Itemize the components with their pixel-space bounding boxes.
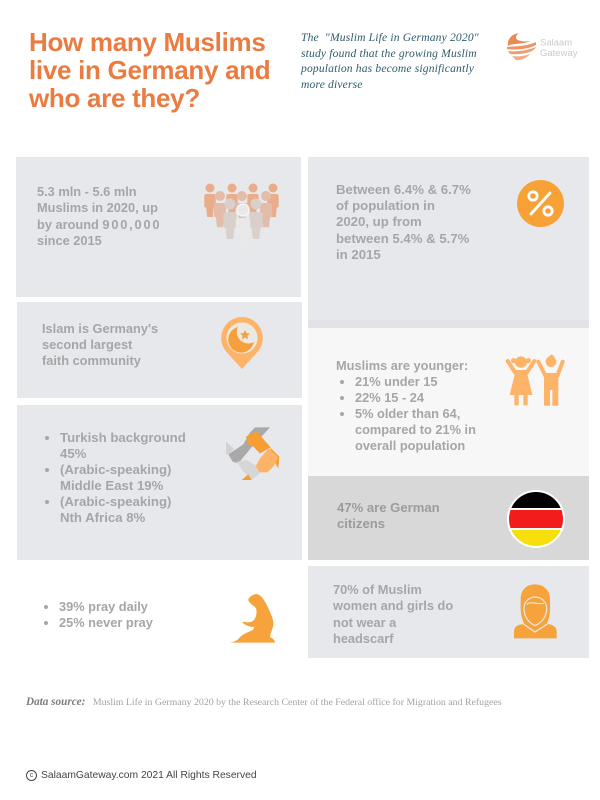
share text: in 2015: [336, 247, 381, 262]
population text: since 2015: [37, 233, 102, 248]
logo: Salaam Gateway: [507, 33, 578, 60]
prayer list: [44, 599, 153, 630]
age text: compared to 21% in: [355, 422, 476, 437]
headscarf text: women and girls do: [333, 598, 453, 613]
faith text: Islam is Germany's: [42, 321, 158, 336]
title: live in Germany and: [29, 55, 270, 85]
prayer list: 39% pray daily: [59, 599, 148, 614]
population text: by around 900,000: [37, 217, 161, 232]
citizens text: [337, 500, 440, 531]
background list: Nth Africa 8%: [60, 510, 145, 525]
population text: Muslims in 2020, up: [37, 200, 158, 215]
age text: Muslims are younger:: [336, 358, 468, 373]
panel: population count: [16, 157, 301, 297]
panel: second largest faith: [17, 302, 302, 398]
background list: (Arabic-speaking): [60, 494, 171, 509]
faith text: second largest: [42, 337, 132, 352]
faith text: faith community: [42, 353, 141, 368]
intro text: study found that the growing Muslim: [301, 47, 477, 60]
intro text: population has become significantly: [301, 62, 474, 75]
logo: Salaam Gateway: Salaam: [540, 38, 572, 48]
headscarf text: [333, 582, 453, 646]
background list: 45%: [60, 446, 86, 461]
share text: of population in: [336, 198, 435, 213]
icon: map pin with crescent: [221, 317, 263, 369]
icon: praying woman: [230, 594, 275, 643]
icon: percent badge: [517, 180, 564, 227]
headscarf text: headscarf: [333, 631, 393, 646]
background list: [45, 430, 186, 525]
share text: Between 6.4% & 6.7%: [336, 182, 471, 197]
panel: younger population: [308, 328, 589, 476]
footer copyright: c: [30, 772, 33, 779]
population text: 5.3 mln - 5.6 mln: [37, 184, 137, 199]
icon: woman in headscarf: [514, 584, 557, 638]
panel: citizens: [308, 476, 589, 560]
faith text: [42, 321, 158, 368]
intro text: The "Muslim Life in Germany 2020": [301, 31, 479, 44]
population text: [37, 184, 161, 248]
citizens text: 47% are German: [337, 500, 440, 515]
share text: between 5.4% & 5.7%: [336, 231, 469, 246]
panel: prayer: [17, 560, 302, 656]
title: who are they?: [29, 83, 200, 113]
data source: Data source: Muslim Life in Germany 2020 by the Research Center of the Federal office for Migration and Refugees: [26, 696, 502, 708]
citizens text: citizens: [337, 516, 385, 531]
intro text: [300, 31, 479, 91]
age text: 22% 15 - 24: [355, 390, 424, 405]
headscarf text: not wear a: [333, 615, 396, 630]
share text: [336, 182, 471, 262]
share text: 2020, up from: [336, 214, 422, 229]
intro text: more diverse: [301, 78, 363, 91]
title: How many Muslims: [29, 27, 265, 57]
age text: 5% older than 64,: [355, 406, 460, 421]
panel: ethnic background: [17, 405, 302, 560]
logo: Salaam Gateway: Gateway: [540, 48, 578, 59]
footer copyright: SalaamGateway.com 2021 All Rights Reserved: [41, 770, 257, 781]
headscarf text: 70% of Muslim: [333, 582, 422, 597]
icon: crowd of people: [204, 184, 279, 239]
panel: headscarf: [308, 566, 589, 658]
icon: interlocked hands: [226, 427, 280, 480]
icon: German flag: [507, 490, 565, 548]
title: [28, 27, 270, 113]
age text: [336, 358, 476, 453]
prayer list: 25% never pray: [59, 615, 153, 630]
background list: Middle East 19%: [60, 478, 163, 493]
background list: Turkish background: [60, 430, 186, 445]
age text: overall population: [355, 438, 465, 453]
age text: 21% under 15: [355, 374, 438, 389]
background list: (Arabic-speaking): [60, 462, 171, 477]
icon: two children: [506, 354, 565, 406]
panel: share of population: [308, 157, 589, 328]
